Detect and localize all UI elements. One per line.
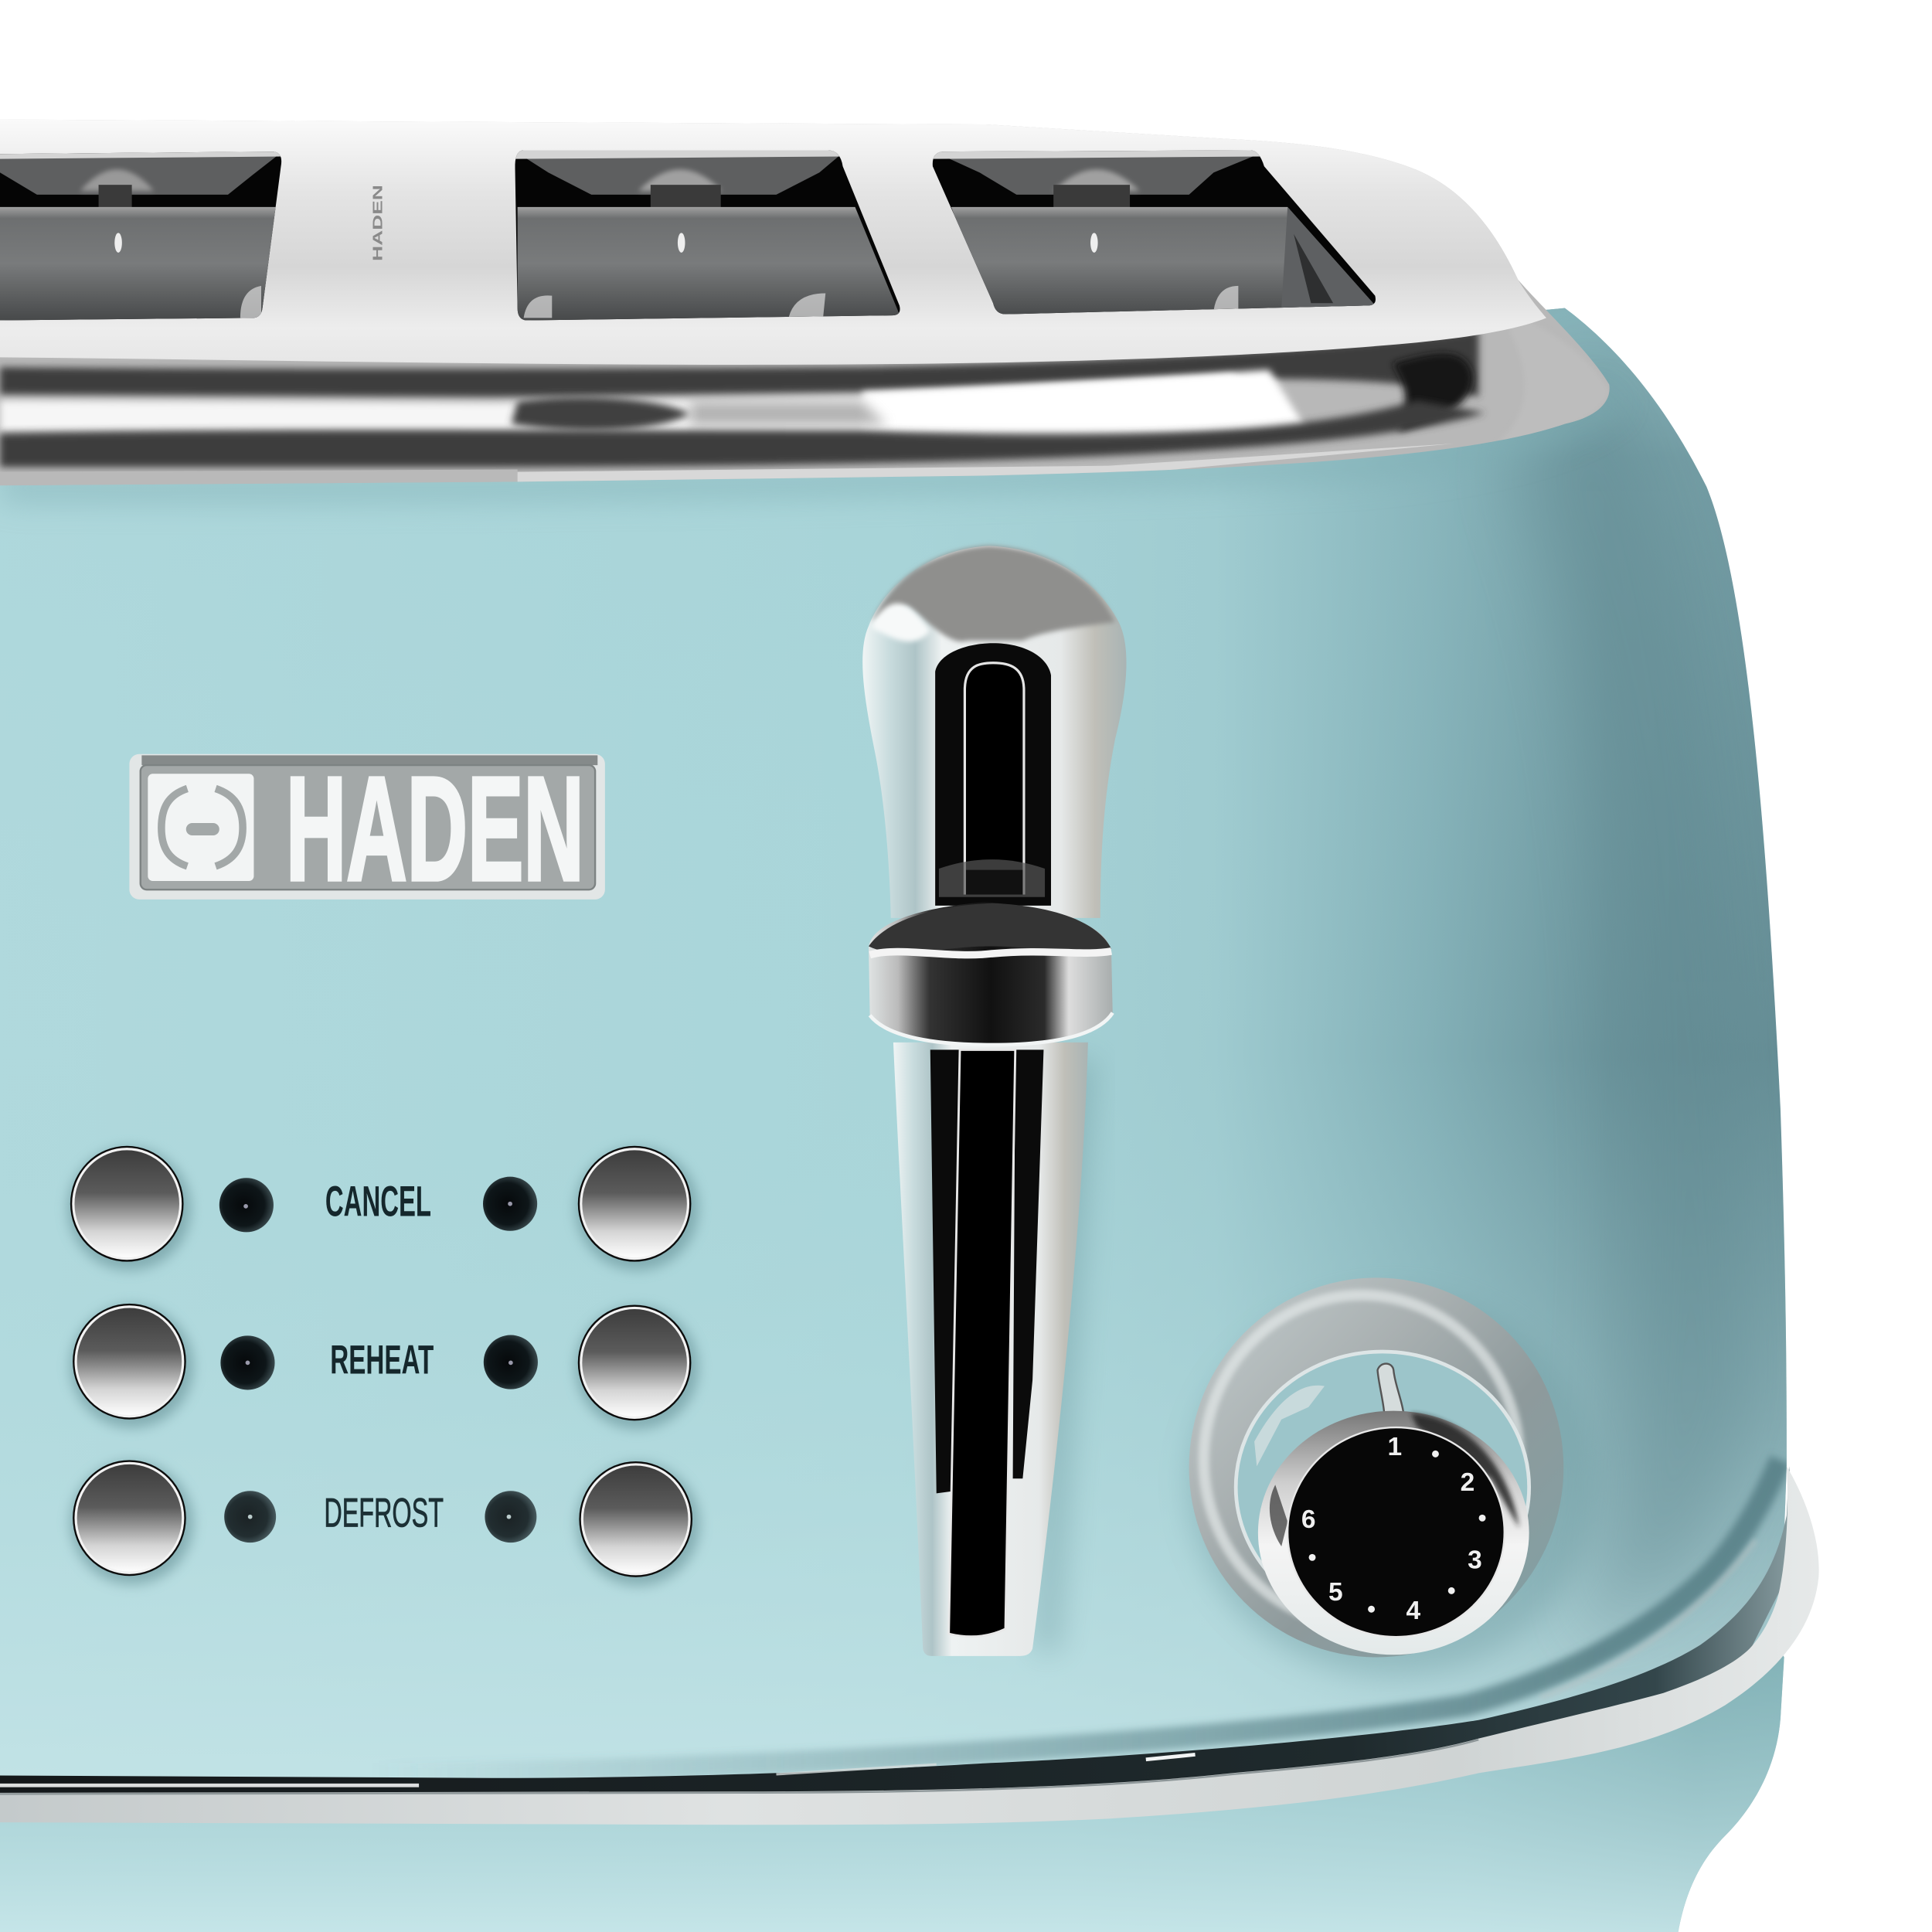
- lever collar: [869, 902, 1113, 1045]
- left led reheat: [220, 1335, 275, 1389]
- lever head: [862, 546, 1127, 918]
- toaster body: [0, 308, 1787, 1805]
- lever handle: [862, 546, 1127, 1656]
- badge wordmark: HADEN: [286, 746, 584, 911]
- label defrost: DEFROST: [324, 1490, 444, 1536]
- dial black face: [1287, 1427, 1505, 1637]
- dial numbers: 3: [1468, 1546, 1482, 1575]
- trim dark upper edge: [0, 1466, 1799, 1805]
- label reheat: REHEAT: [330, 1338, 434, 1383]
- lever lower body: [893, 1043, 1088, 1656]
- toast slot 2: [512, 145, 906, 324]
- lever lower dark strips: [930, 1049, 1043, 1493]
- dial numbers: 6: [1301, 1505, 1316, 1534]
- right button defrost: [577, 1461, 700, 1586]
- dial outer ring: [1189, 1277, 1563, 1657]
- lever upper slot: [935, 643, 1051, 906]
- lid rim: [0, 111, 1639, 493]
- dial numbers: 1: [1388, 1433, 1402, 1461]
- lever lower slot: [949, 1049, 1015, 1637]
- HADEN badge: [129, 746, 605, 911]
- right led cancel: [483, 1177, 537, 1231]
- dial numbers: [1301, 1433, 1482, 1625]
- dial inner opening: [1236, 1352, 1529, 1623]
- toast slot 1: [0, 148, 290, 327]
- dial chrome knob: [1258, 1411, 1529, 1655]
- left led cancel: [219, 1178, 274, 1232]
- right led reheat: [484, 1335, 538, 1389]
- badge logo: [148, 774, 253, 881]
- left button defrost: [70, 1460, 193, 1584]
- left button cancel: [68, 1146, 191, 1270]
- dial numbers: 5: [1328, 1578, 1343, 1607]
- left button reheat: [70, 1304, 193, 1428]
- recess above chrome trim: [369, 1460, 1781, 1774]
- left led defrost: [224, 1491, 276, 1543]
- dial numbers: 2: [1461, 1468, 1475, 1497]
- right button reheat: [576, 1304, 699, 1429]
- dial dots: [1309, 1451, 1486, 1613]
- temperature dial: [1189, 1277, 1596, 1675]
- trim chrome band body: [0, 1466, 1819, 1825]
- dial pointer: [1378, 1364, 1405, 1426]
- dial shadow: [1189, 1294, 1596, 1675]
- chrome trim band: [0, 1466, 1819, 1825]
- lid top plate: [0, 120, 1546, 365]
- lever shadow: [1035, 1060, 1097, 1651]
- right led defrost: [485, 1491, 536, 1543]
- embossed lid text: HADEN: [369, 185, 385, 261]
- toaster base below chrome trim: [0, 1639, 1784, 1932]
- dial numbers: 4: [1406, 1597, 1420, 1625]
- right button cancel: [576, 1146, 699, 1270]
- label cancel: CANCEL: [325, 1177, 431, 1226]
- toast slot 3: [924, 145, 1380, 318]
